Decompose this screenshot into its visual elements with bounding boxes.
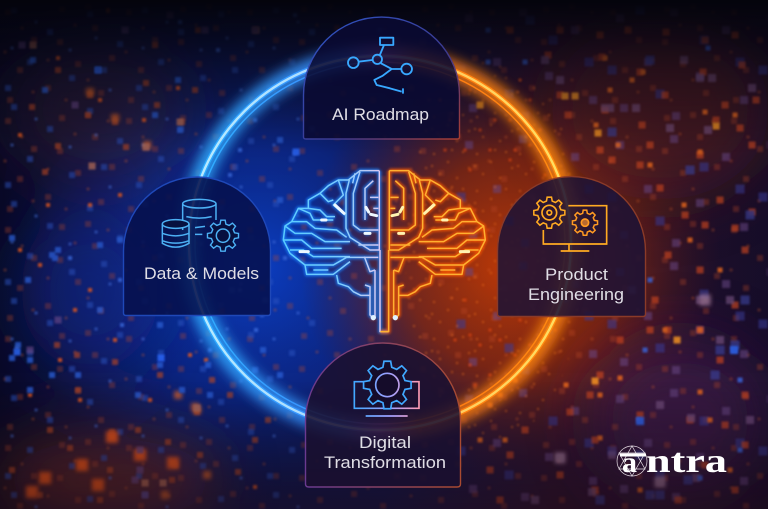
- right hemisphere: [380, 171, 485, 332]
- label: AI Roadmap: AI Roadmap: [332, 105, 429, 124]
- ring: [189, 56, 571, 430]
- icon: gears and monitor: [534, 197, 607, 251]
- brain glow: [283, 171, 485, 332]
- label: Digital Transformation: [324, 433, 446, 472]
- panel: Product Engineering: [498, 177, 646, 316]
- label: Product Engineering: [528, 265, 624, 304]
- label: Product Engineering: Product: [545, 265, 608, 284]
- icon: gear on monitor: [354, 361, 419, 416]
- left hemisphere: [283, 171, 388, 332]
- label: Digital Transformation: Transformation: [324, 453, 446, 472]
- logo: antra: [617, 443, 727, 480]
- brain core highlights: [300, 205, 469, 320]
- label: Product Engineering: Engineering: [528, 285, 624, 304]
- logo: antra: a: [622, 446, 637, 479]
- logo: antra: ntra: [646, 443, 727, 480]
- icon: database and gear: [162, 199, 238, 251]
- icon: roadmap: [348, 38, 412, 94]
- label: Data & Models: Data & Models: [144, 264, 259, 283]
- panel: AI Roadmap: [304, 17, 460, 139]
- panel: Data & Models: [124, 177, 270, 316]
- brain: [283, 171, 485, 332]
- panel: Digital Transformation: [306, 343, 460, 487]
- label: Digital Transformation: Digital: [359, 433, 411, 452]
